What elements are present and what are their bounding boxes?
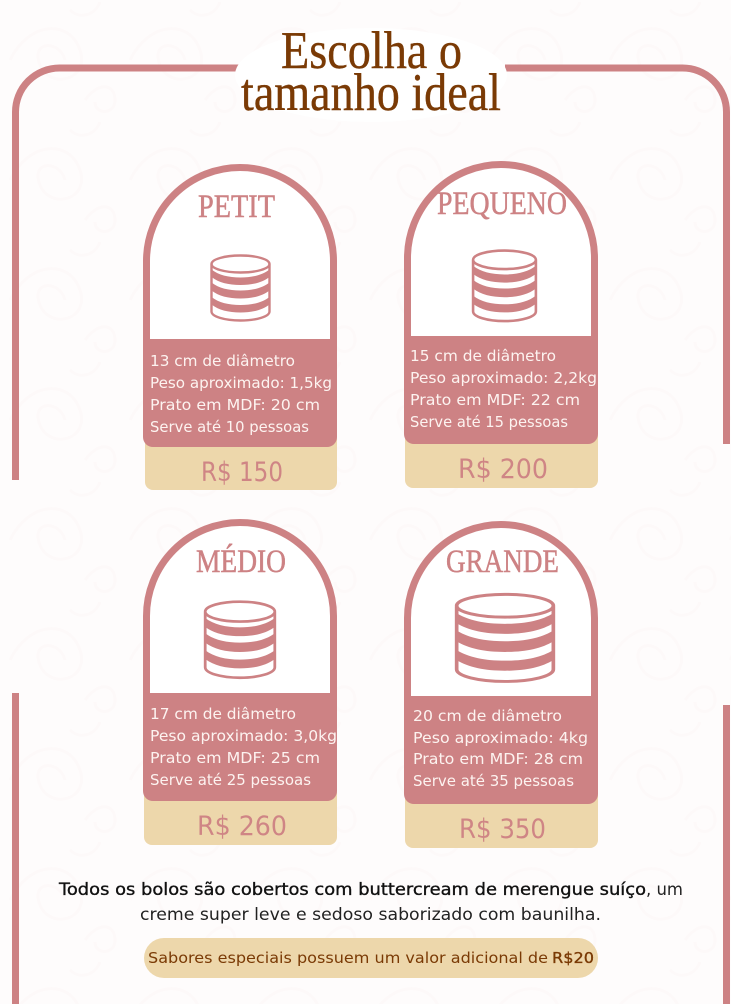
info box: grande: Serve até 35 pessoas [413,772,574,790]
info box: pequeno: 15 cm de diâmetro [410,347,556,365]
info box: grande: 20 cm de diâmetro [413,707,562,725]
callout: additional flavors: R$20 [552,949,594,967]
arch: grande [408,524,594,702]
price: petit [145,430,337,490]
price: medio: R$ 260 [197,811,287,842]
info box: grande [404,696,598,804]
callout: additional flavors [144,938,598,978]
arch: medio [146,522,334,699]
icon: cake grande [457,594,553,681]
arch: petit [146,168,334,345]
heading: medio: MÉDIO [196,543,286,580]
price: pequeno [405,428,598,488]
info box: medio: 17 cm de diâmetro [150,705,296,723]
info box: medio [143,693,337,801]
price: medio [144,785,337,845]
info box: pequeno: Prato em MDF: 22 cm [410,391,580,409]
info box: petit: Prato em MDF: 20 cm [150,396,320,414]
info box: petit: 13 cm de diâmetro [150,352,295,370]
panel: petit [143,168,337,490]
icon: cake medio [205,602,275,678]
heading: pequeno: PEQUENO [437,186,567,222]
heading: grande: GRANDE [446,544,559,580]
info box: medio: Peso aproximado: 3,0kg [150,727,337,745]
title [235,22,507,122]
icon: cake pequeno [473,251,536,321]
panel: grande [404,524,598,848]
icon: cake petit [212,256,270,320]
info box: pequeno: Peso aproximado: 2,2kg [410,369,597,387]
price: grande: R$ 350 [459,814,546,845]
panel: pequeno [404,165,598,488]
info box: grande: Prato em MDF: 28 cm [413,750,583,768]
text block: buttercream note: Todos os bolos são cobertos com buttercream de merengue suíço [58,880,646,899]
text block: buttercream note: , um [646,880,683,899]
title: Escolha o [281,22,462,80]
info box: petit: Peso aproximado: 1,5kg [150,374,332,392]
price: grande [405,788,598,848]
text block: buttercream note: creme super leve e sedoso saborizado com baunilha. [140,905,601,924]
info box: pequeno [404,336,598,444]
text block: buttercream note [58,880,683,924]
title: tamanho ideal [241,64,501,122]
price: petit: R$ 150 [201,457,283,488]
price: pequeno: R$ 200 [458,454,548,485]
callout: additional flavors: Sabores especiais possuem um valor adicional de [148,949,548,967]
info box: petit [143,339,337,447]
info box: medio: Serve até 25 pessoas [150,771,311,789]
panel: medio [143,522,337,845]
info box: medio: Prato em MDF: 25 cm [150,749,320,767]
info box: pequeno: Serve até 15 pessoas [410,413,568,431]
arch: pequeno [408,165,594,342]
info box: petit: Serve até 10 pessoas [150,418,309,436]
info box: grande: Peso aproximado: 4kg [413,729,588,747]
heading: petit: PETIT [198,189,275,225]
